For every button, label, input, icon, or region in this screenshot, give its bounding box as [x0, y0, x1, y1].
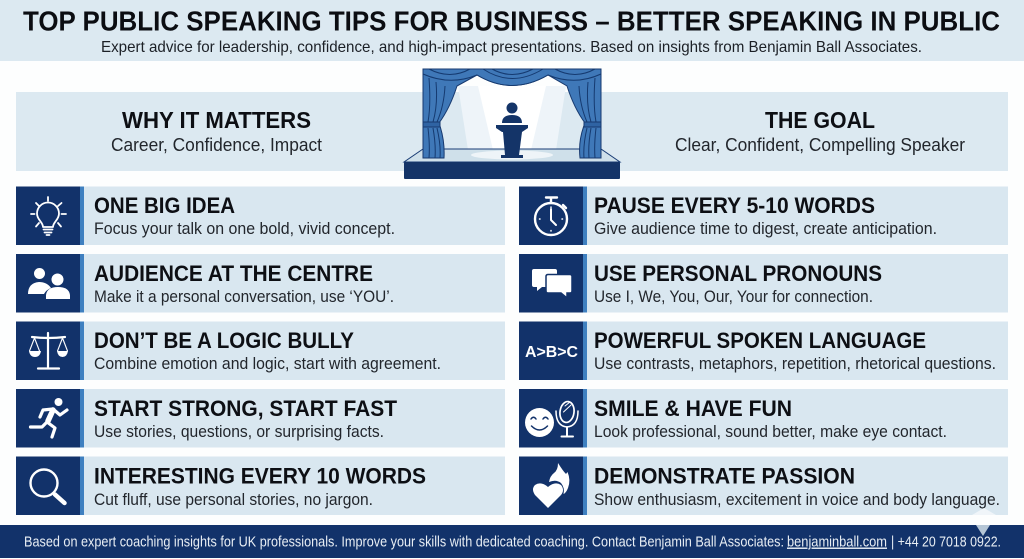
footer bar — [0, 508, 1024, 558]
card: powerful spoken language — [519, 322, 1008, 380]
text: Look professional, sound better, make eye contact. — [594, 423, 947, 441]
heading: SMILE & HAVE FUN — [594, 396, 792, 421]
heading: DON’T BE A LOGIC BULLY — [94, 328, 354, 353]
card: use personal pronouns — [519, 254, 1008, 312]
icon: smiley and mirror — [525, 401, 578, 437]
heading: ONE BIG IDEA — [94, 193, 235, 218]
card: smile and have fun — [519, 389, 1008, 448]
icon: light bulb — [31, 197, 66, 235]
card: one big idea — [16, 186, 505, 245]
text: Combine emotion and logic, start with agreement. — [94, 355, 441, 373]
icon: magnifying glass — [30, 470, 64, 503]
card: don't be a logic bully — [16, 322, 505, 380]
header band — [0, 0, 1024, 61]
icon: A>B>C: A>B>C — [525, 344, 578, 361]
panel: why it matters and the goal — [16, 92, 1008, 171]
text: why it matters detail: Career, Confidence, Impact — [111, 134, 322, 155]
footer text: Based on expert coaching insights for UK professionals. Improve your skills with dedicated coaching. Contact Benjamin Ball Associates: — [24, 534, 784, 550]
card: pause every 5-10 words — [519, 186, 1008, 245]
icon: heart with flame — [533, 463, 569, 508]
heading: POWERFUL SPOKEN LANGUAGE — [594, 328, 926, 353]
heading: START STRONG, START FAST — [94, 396, 398, 421]
text: the goal detail: Clear, Confident, Compelling Speaker — [675, 134, 965, 155]
text: Focus your talk on one bold, vivid concept. — [94, 220, 395, 238]
text: Cut fluff, use personal stories, no jargon. — [94, 491, 373, 509]
icon: runner — [30, 398, 67, 437]
curtains — [423, 69, 601, 158]
heading: PAUSE EVERY 5-10 WORDS — [594, 193, 875, 218]
footer link: benjaminball.com — [787, 534, 887, 550]
card: demonstrate passion — [519, 456, 1008, 515]
card: audience at the centre — [16, 254, 505, 312]
text: Use stories, questions, or surprising facts. — [94, 423, 384, 441]
icon: two people — [28, 268, 70, 299]
text: Give audience time to digest, create anticipation. — [594, 220, 937, 238]
text: Make it a personal conversation, use ‘YOU’. — [94, 288, 394, 306]
heading: why it matters: WHY IT MATTERS — [122, 107, 311, 133]
heading: USE PERSONAL PRONOUNS — [594, 261, 882, 286]
illustration: stage with speaker at podium — [404, 69, 620, 179]
card: start strong, start fast — [16, 389, 505, 448]
heading: AUDIENCE AT THE CENTRE — [94, 261, 373, 286]
heading: DEMONSTRATE PASSION — [594, 464, 855, 488]
heading: INTERESTING EVERY 10 WORDS — [94, 464, 426, 488]
subtitle: Expert advice for leadership, confidence, and high-impact presentations. Based on insights from Benjamin Ball Associates. — [101, 39, 922, 56]
icon: speech bubbles — [532, 269, 572, 298]
speaker and podium — [496, 102, 528, 158]
icon: stopwatch — [535, 198, 567, 235]
icon: balance scales — [29, 333, 68, 368]
text: Use I, We, You, Our, Your for connection. — [594, 288, 873, 306]
heading: the goal: THE GOAL — [765, 107, 875, 133]
footer phone: | +44 20 7018 0922. — [891, 534, 1001, 550]
card: interesting every 10 words — [16, 456, 505, 515]
text: Show enthusiasm, excitement in voice and body language. — [594, 491, 1000, 509]
text: Use contrasts, metaphors, repetition, rhetorical questions. — [594, 355, 996, 373]
